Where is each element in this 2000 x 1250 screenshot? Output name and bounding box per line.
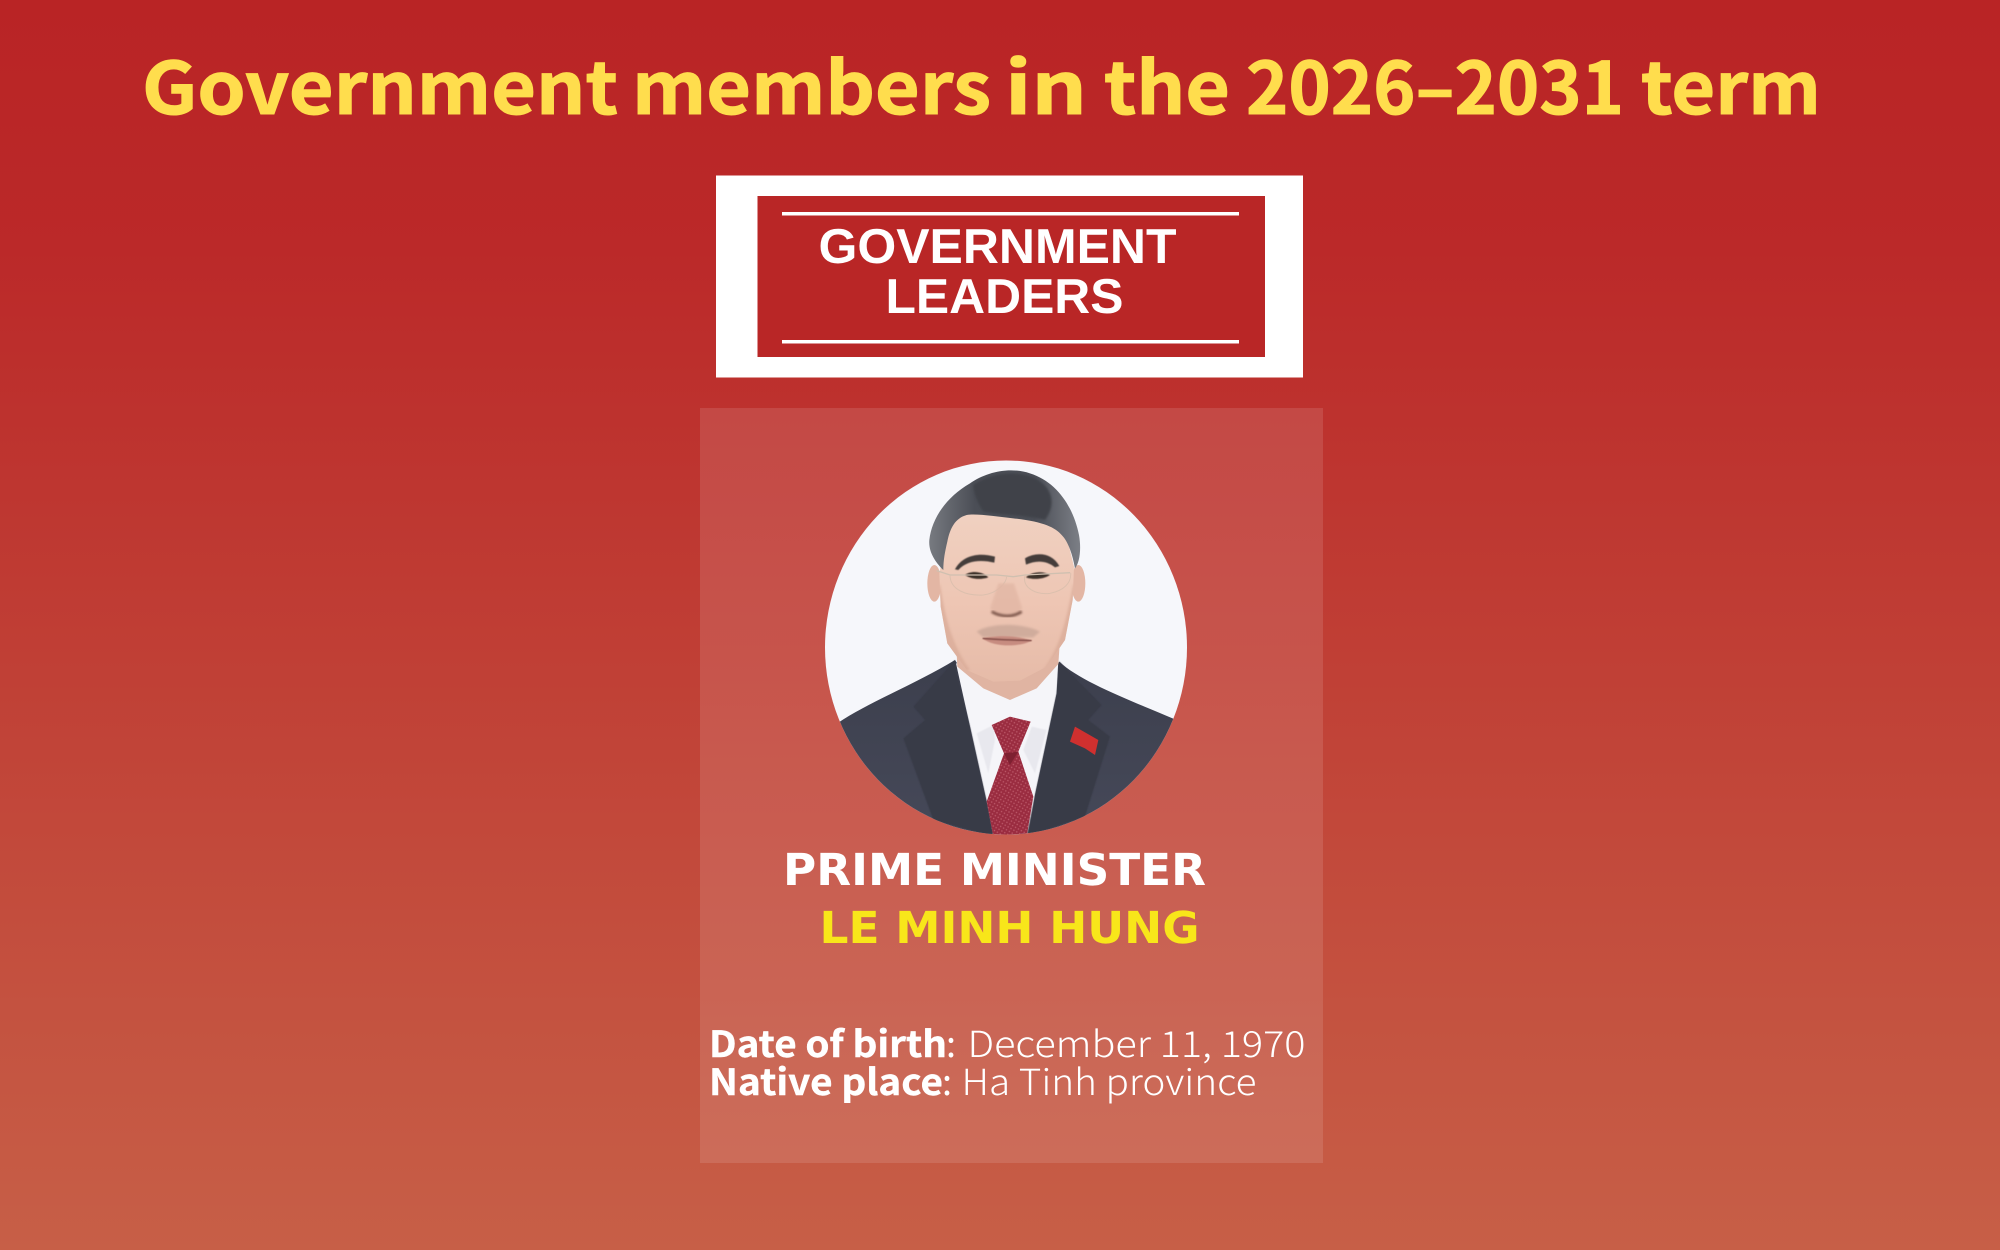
neck xyxy=(956,648,1060,700)
badge heading: GOVERNMENT xyxy=(818,220,1177,274)
title: members xyxy=(632,30,991,135)
role label: PRIME MINISTER xyxy=(783,845,1206,896)
biography details: Native place xyxy=(709,1054,943,1106)
biography details: Ha Tinh province xyxy=(962,1054,1256,1106)
lapels xyxy=(903,660,993,837)
tie xyxy=(987,717,1033,837)
nose shadow xyxy=(992,584,1021,614)
face shading xyxy=(940,586,1073,670)
biography details: : xyxy=(946,1016,956,1068)
title: Government xyxy=(142,30,618,135)
glasses xyxy=(937,571,1070,577)
badge heading: LEADERS xyxy=(886,270,1124,324)
biography details: Date of birth xyxy=(709,1016,947,1068)
eyes xyxy=(965,572,988,579)
title xyxy=(142,30,1821,135)
title: 2026–2031 xyxy=(1246,30,1624,135)
eyebrows xyxy=(955,555,995,570)
hair xyxy=(929,470,1080,570)
mustache shadow xyxy=(977,625,1040,637)
biography details: December 11, 1970 xyxy=(968,1016,1306,1068)
section badge: government leaders xyxy=(716,176,1303,378)
title: the xyxy=(1104,30,1230,135)
badge heading xyxy=(818,220,1177,324)
biography details: : xyxy=(942,1054,952,1106)
mouth xyxy=(983,636,1032,645)
title: term xyxy=(1641,30,1821,135)
suit jacket xyxy=(830,660,1180,840)
ears xyxy=(927,565,941,602)
lapel pin xyxy=(1070,727,1098,755)
biography details xyxy=(709,1016,1306,1106)
title: in xyxy=(1005,30,1087,135)
name label: LE MINH HUNG xyxy=(820,903,1200,954)
face xyxy=(940,514,1074,674)
portrait photo xyxy=(820,455,1192,840)
shirt xyxy=(956,660,1058,837)
panel: prime minister profile xyxy=(700,408,1323,1163)
